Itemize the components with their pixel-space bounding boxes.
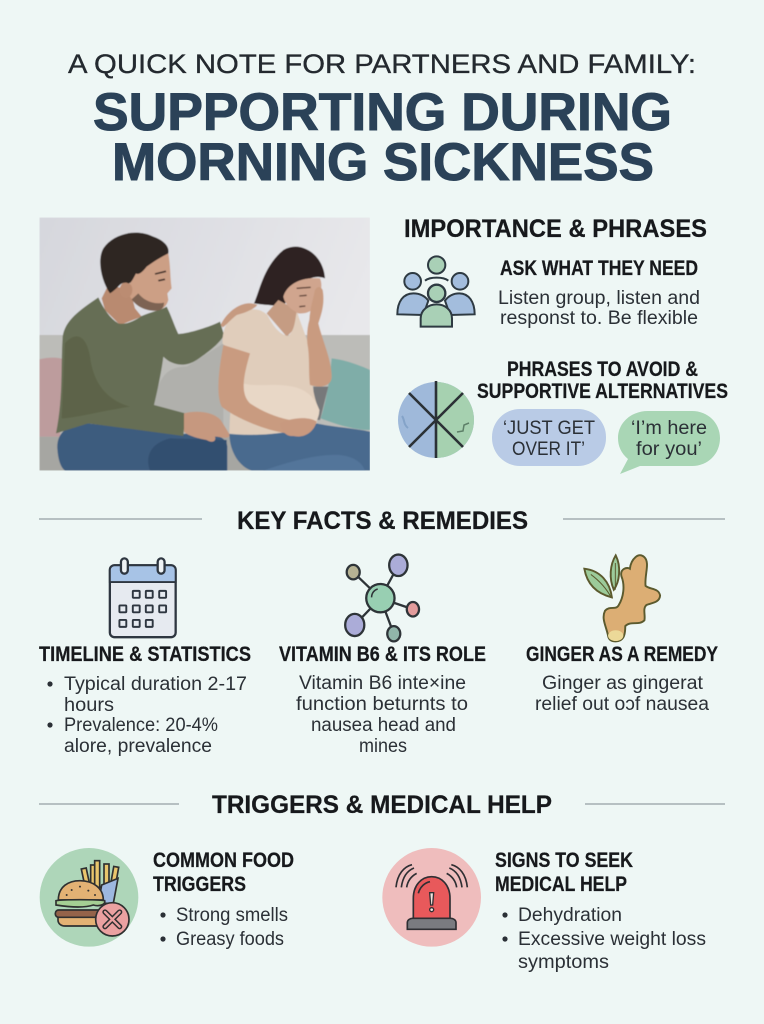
- woman's jeans: [229, 423, 370, 471]
- text: ginger: relief out oɔf nausea: [535, 694, 709, 715]
- text: ask what they need: Listen group, listen and: [498, 288, 700, 309]
- icon: group of people: [397, 256, 475, 327]
- woman's hair: [254, 247, 325, 307]
- text: vitamin B6: mines: [359, 736, 407, 757]
- woman's neck: [267, 300, 300, 337]
- icon: divided circle: [398, 381, 474, 458]
- heading: signs to seek medical help: SIGNS TO SEEK: [495, 849, 633, 872]
- text: ginger: Ginger as gingerat: [542, 673, 704, 694]
- woman's left arm and hand: [218, 345, 290, 433]
- man's face: [130, 253, 172, 311]
- man's sweater: [56, 297, 224, 436]
- speech bubble: just get over it: ‘JUST GET: [503, 418, 595, 439]
- man's neck: [102, 285, 142, 325]
- subtitle: A QUICK NOTE FOR PARTNERS AND FAMILY:: [68, 49, 696, 79]
- heading: common food triggers: TRIGGERS: [153, 873, 246, 896]
- bullet list: medical signs: [502, 905, 706, 973]
- panel: ginger: [526, 555, 718, 715]
- man's hand on shoulder: [221, 303, 257, 327]
- heading: common food triggers: [153, 849, 294, 896]
- main title: [93, 83, 672, 192]
- man's hands: [184, 412, 230, 442]
- speech bubble: just get over it: OVER IT’: [512, 439, 585, 460]
- text: vitamin B6: function beturnts to: [296, 694, 468, 715]
- text: vitamin B6: nausea head and: [311, 715, 456, 736]
- man's jeans: [57, 423, 227, 471]
- bullet list: food triggers: [160, 905, 288, 950]
- bullet list: timeline: alore, prevalence: [64, 736, 212, 757]
- heading: vitamin B6: VITAMIN B6 & ITS ROLE: [279, 643, 486, 666]
- icon: burger and fries with cross: [40, 848, 138, 947]
- heading: importance and phrases: IMPORTANCE & PHRASES: [404, 215, 707, 243]
- heading: signs to seek medical help: MEDICAL HELP: [495, 873, 627, 896]
- icon: molecule: [345, 555, 419, 641]
- heading: signs to seek medical help: [495, 849, 633, 896]
- text: vitamin B6: [296, 673, 468, 757]
- icon: alarm siren: [382, 848, 481, 947]
- section heading: key facts and remedies: KEY FACTS & REMEDIES: [237, 507, 528, 535]
- speech bubble: I'm here for you: ‘I’m here: [631, 418, 707, 439]
- panel: common food triggers: [40, 848, 294, 950]
- woman's right arm and hand: [307, 287, 332, 387]
- icon: calendar: [110, 558, 176, 637]
- bullet list: timeline: Prevalence: 20-4%: [64, 715, 218, 736]
- speech bubble: just get over it: [492, 409, 606, 466]
- bullet list: timeline: hours: [64, 695, 114, 716]
- panel: signs to seek medical help: [382, 848, 706, 973]
- panel: vitamin B6: [279, 555, 486, 757]
- main title: SUPPORTING DURING: [93, 83, 672, 142]
- bullet list: medical signs: Dehydration: [518, 905, 622, 926]
- text: ginger: [535, 673, 709, 715]
- title block: [68, 49, 696, 192]
- subheading: phrases to avoid: PHRASES TO AVOID &: [507, 358, 698, 381]
- panel: importance and phrases: [397, 215, 728, 474]
- bullet list: timeline: Typical duration 2-17: [64, 674, 247, 695]
- speech bubble: I'm here for you: [618, 411, 720, 474]
- text: vitamin B6: Vitamin B6 inte×ine: [299, 673, 466, 694]
- bullet list: food triggers: Greasy foods: [176, 929, 284, 950]
- heading: ginger: GINGER AS A REMEDY: [526, 643, 718, 666]
- subheading: ask what they need: ASK WHAT THEY NEED: [500, 257, 698, 280]
- subheading: phrases to avoid: [477, 358, 728, 403]
- speech bubble: I'm here for you: for you’: [636, 439, 702, 460]
- bullet list: medical signs: symptoms: [518, 952, 609, 973]
- text: ask what they need: responst to. Be flexible: [500, 308, 698, 329]
- man's hair: [100, 233, 169, 293]
- photo: partner comforting pregnant woman on sofa: [39, 217, 370, 471]
- panel: timeline and statistics: [39, 558, 251, 757]
- heading: timeline and statistics: TIMELINE & STATISTICS: [39, 643, 251, 666]
- woman's face: [283, 278, 321, 313]
- bullet list: medical signs: Excessive weight loss: [518, 929, 706, 950]
- section heading: triggers and medical help: TRIGGERS & MEDICAL HELP: [212, 791, 552, 819]
- bullet list: food triggers: Strong smells: [176, 905, 288, 926]
- woman's shirt: [223, 309, 319, 435]
- heading: common food triggers: COMMON FOOD: [153, 849, 294, 872]
- icon: ginger root: [584, 555, 660, 641]
- text: ask what they need: [498, 288, 700, 329]
- bullet list: timeline: [47, 674, 247, 757]
- main title: MORNING SICKNESS: [112, 133, 654, 192]
